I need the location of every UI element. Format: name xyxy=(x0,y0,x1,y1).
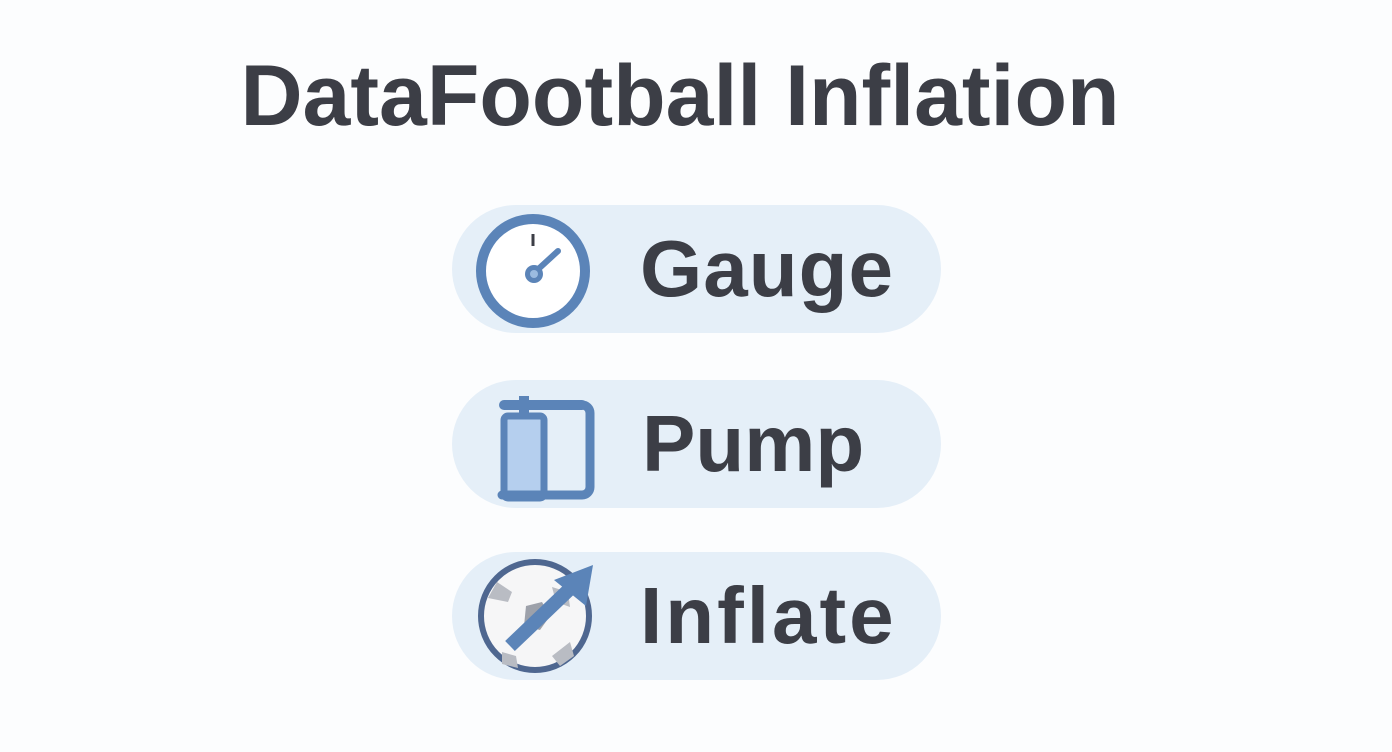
panel: pump xyxy=(452,380,941,508)
icon: football with arrow xyxy=(478,559,593,673)
panel: inflate xyxy=(452,552,941,680)
panel: gauge xyxy=(452,205,941,333)
icon: gauge xyxy=(476,214,590,328)
label: Pump: Pump xyxy=(642,399,864,488)
icon: pump xyxy=(498,396,594,502)
label: Gauge: Gauge xyxy=(640,224,894,313)
label: Inflate: Inflate xyxy=(640,571,897,660)
title: DataFootball Inflation xyxy=(240,48,1120,144)
